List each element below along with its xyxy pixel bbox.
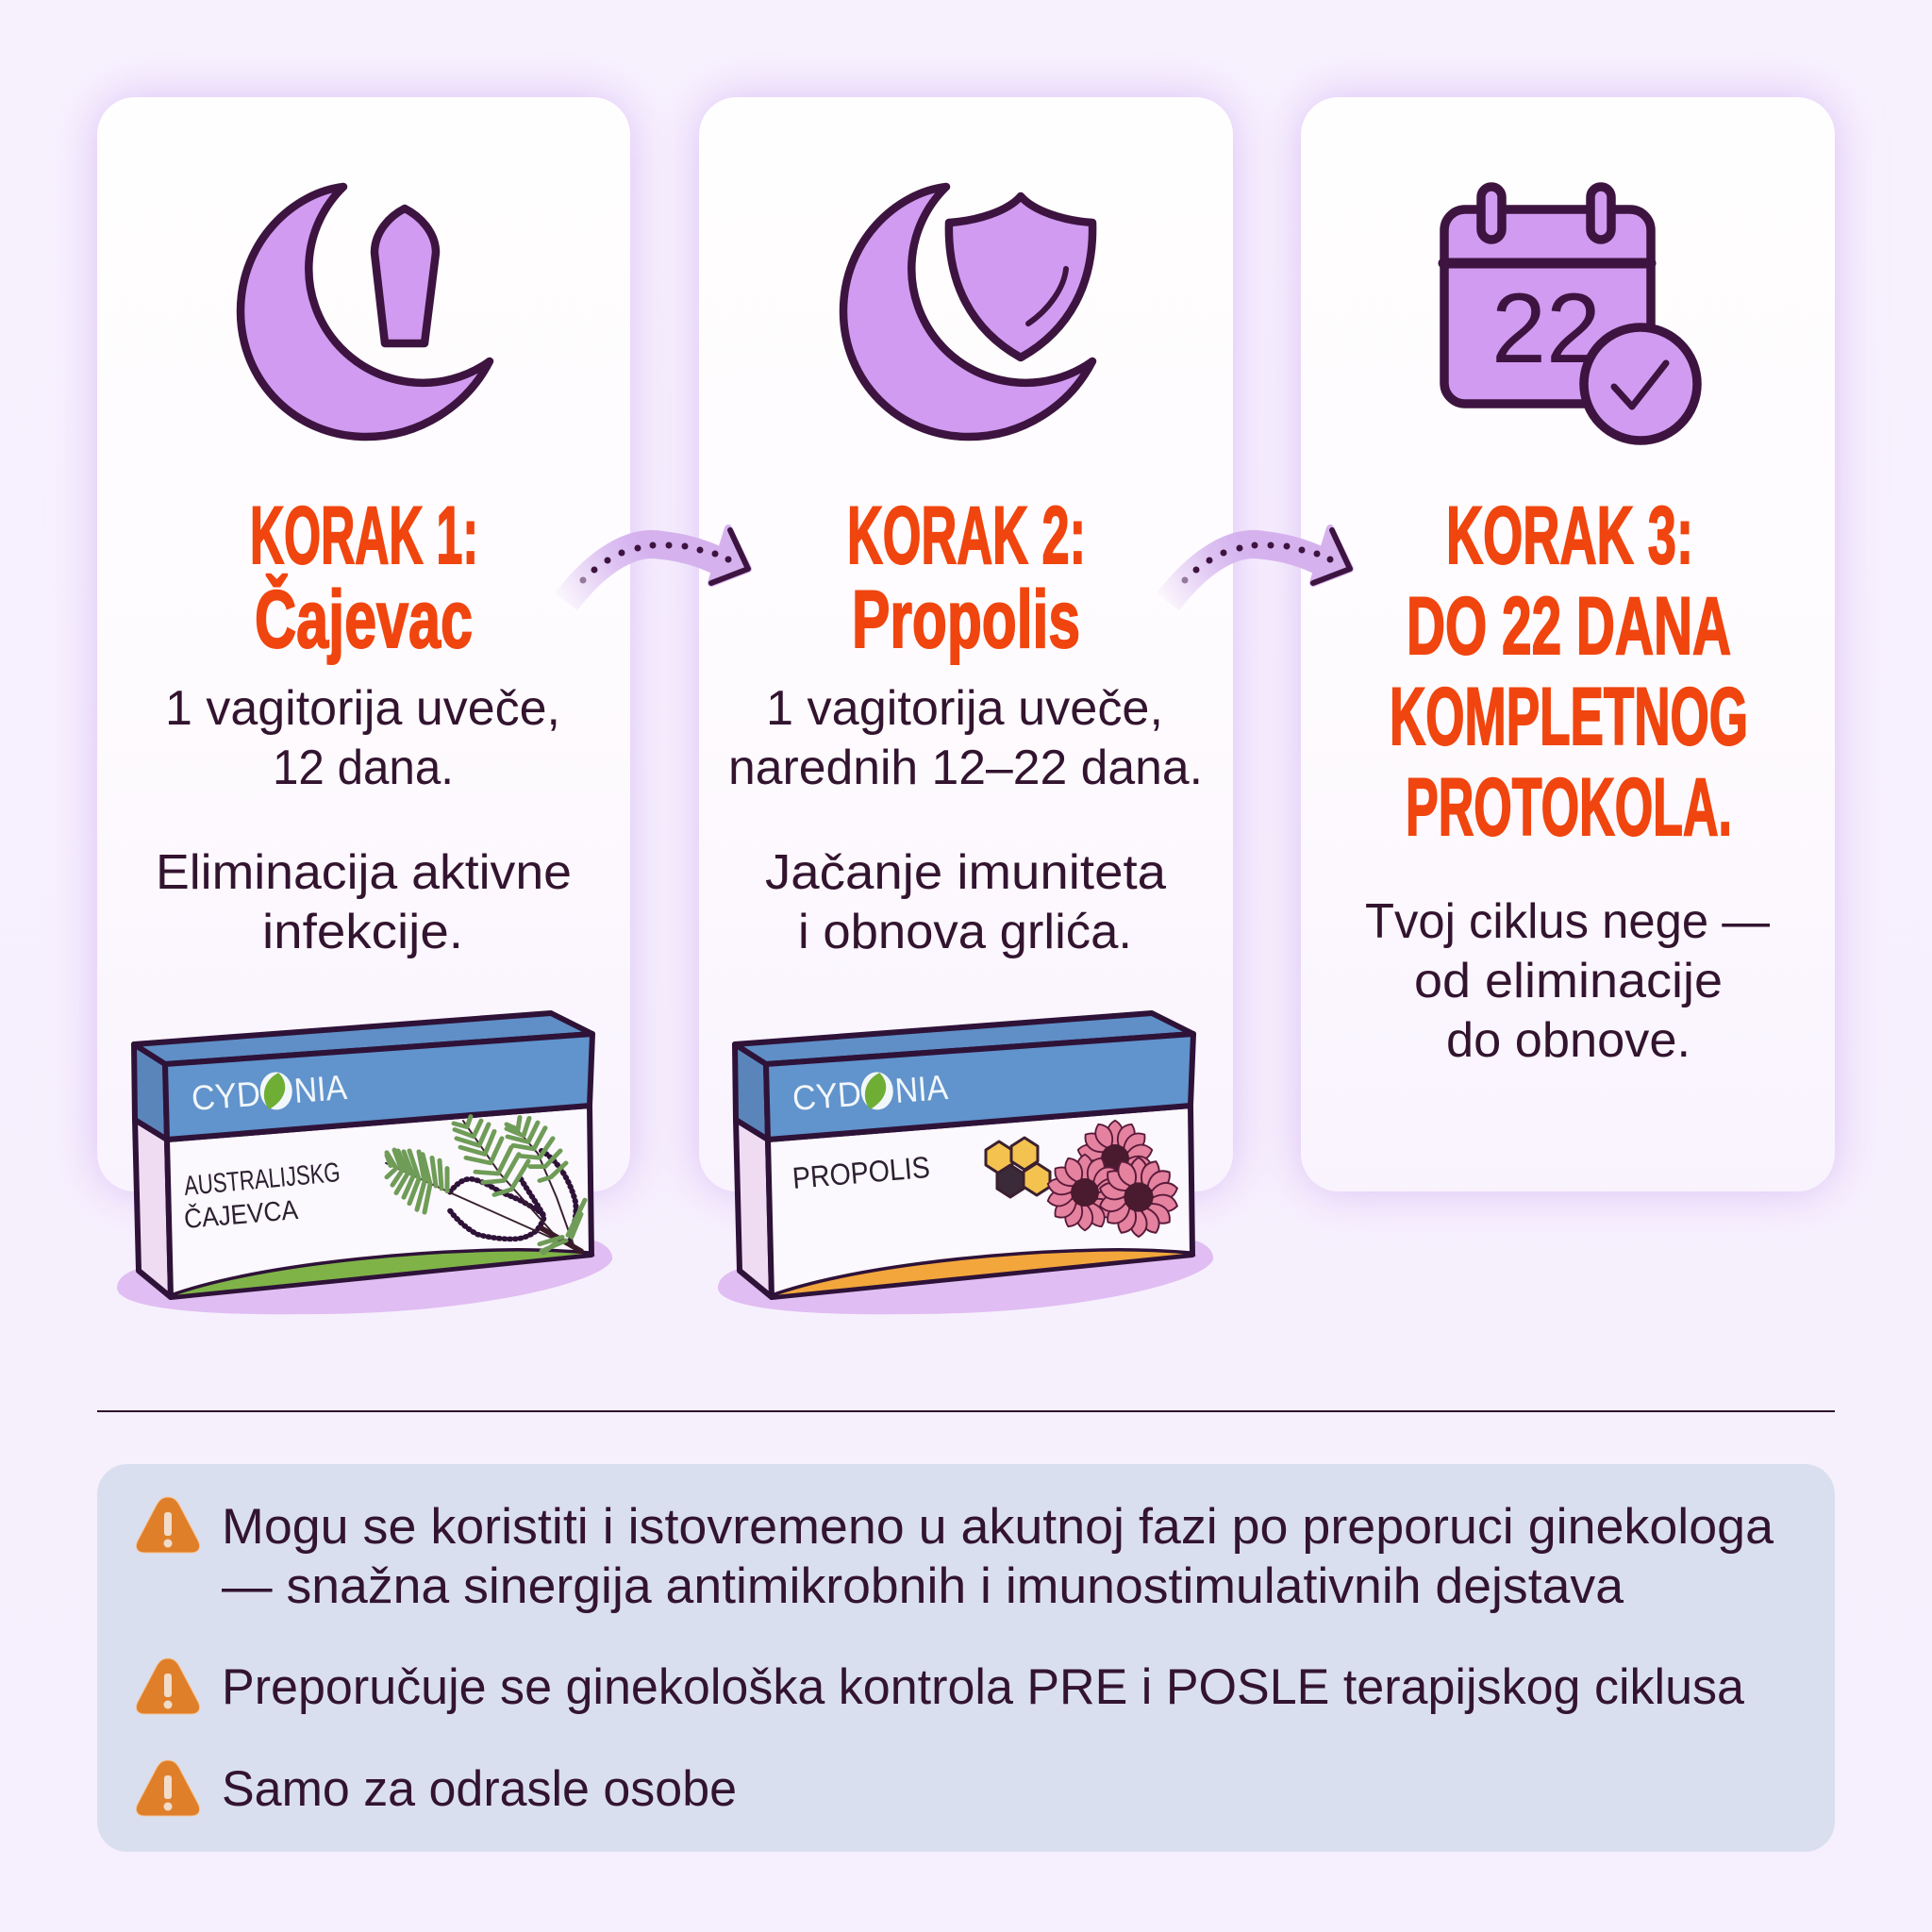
heading: step 2 xyxy=(847,491,1086,665)
brand logo xyxy=(191,1067,348,1118)
product name: AUSTRALIJSKG xyxy=(183,1158,341,1202)
text: step 3 description: od eliminacije xyxy=(1414,954,1723,1008)
text: step 2 dosage: 1 vagitorija uveče, xyxy=(766,681,1163,736)
box body xyxy=(134,1013,592,1297)
warning text 1: — snažna sinergija antimikrobnih i imunostimulativnih dejstava xyxy=(222,1558,1624,1614)
heading: step 3 xyxy=(1390,491,1748,853)
panel: step 2 card xyxy=(699,97,1233,1191)
brand logo: CYD xyxy=(191,1074,261,1118)
warning text 1: Mogu se koristiti i istovremeno u akutnoj fazi po preporuci ginekologa xyxy=(222,1499,1774,1555)
text: step 1 purpose: infekcije. xyxy=(262,905,463,959)
arrow: step 1 to step 2 xyxy=(566,528,748,602)
text: step 2 dosage: narednih 12–22 dana. xyxy=(728,741,1203,795)
honeycomb xyxy=(986,1138,1050,1197)
text: step 1 dosage: 1 vagitorija uveče, xyxy=(165,681,560,736)
brand logo: NIA xyxy=(893,1068,949,1110)
panel: step 3 card xyxy=(1301,97,1835,1191)
text: step 1 dosage xyxy=(165,681,560,795)
icon: warning 2 xyxy=(136,1658,200,1714)
text: step 2 purpose: i obnova grlića. xyxy=(798,905,1132,959)
text: step 3 description xyxy=(1365,894,1770,1068)
warning text 3: Samo za odrasle osobe xyxy=(222,1761,737,1817)
product name xyxy=(183,1158,341,1235)
icon: warning 3 xyxy=(136,1760,200,1816)
icon: moon with shield xyxy=(843,187,1092,437)
box shadow xyxy=(117,1236,612,1314)
heading: step 1: Čajevac xyxy=(255,575,473,665)
text: step 1 purpose xyxy=(156,845,572,959)
icon: warning 1 xyxy=(136,1497,200,1553)
heading: step 3: KORAK 3: xyxy=(1446,491,1693,581)
icon: calendar 22 with check: 22 xyxy=(1491,274,1601,384)
warning text 2: Preporučuje se ginekološka kontrola PRE i POSLE terapijskog ciklusa xyxy=(222,1659,1745,1715)
product box: tea tree xyxy=(117,1013,612,1314)
text: step 3 description: do obnove. xyxy=(1446,1013,1690,1068)
box shadow xyxy=(718,1236,1213,1314)
heading: step 1: KORAK 1: xyxy=(250,491,478,581)
colour swoosh xyxy=(772,1250,1192,1297)
tea tree illustration xyxy=(386,1116,585,1253)
divider xyxy=(97,1410,1835,1412)
text: step 2 dosage xyxy=(728,681,1203,795)
product name: ČAJEVCA xyxy=(183,1193,300,1235)
icon: calendar 22 with check xyxy=(1443,187,1697,441)
arrow: step 2 to step 3 xyxy=(1168,528,1350,602)
product name: PROPOLIS xyxy=(791,1150,931,1195)
heading: step 3: PROTOKOLA. xyxy=(1406,762,1732,853)
text: step 2 purpose xyxy=(765,845,1166,959)
product box: propolis xyxy=(718,1013,1213,1314)
text: step 3 description: Tvoj ciklus nege — xyxy=(1365,894,1770,949)
panel: warnings xyxy=(97,1464,1835,1852)
heading: step 3: DO 22 DANA xyxy=(1407,581,1731,672)
brand logo: NIA xyxy=(292,1068,348,1110)
heading: step 2: Propolis xyxy=(852,575,1080,665)
warning text 1 xyxy=(222,1499,1774,1614)
box body xyxy=(735,1013,1193,1297)
colour swoosh xyxy=(171,1250,591,1297)
card glow xyxy=(97,97,1835,1191)
echinacea flowers xyxy=(1046,1121,1179,1237)
brand logo xyxy=(791,1067,949,1118)
panel: step 1 card xyxy=(97,97,630,1191)
heading: step 1 xyxy=(250,491,478,665)
text: step 1 purpose: Eliminacija aktivne xyxy=(156,845,572,900)
text: step 1 dosage: 12 dana. xyxy=(273,741,454,795)
heading: step 2: KORAK 2: xyxy=(847,491,1086,581)
text: step 2 purpose: Jačanje imuniteta xyxy=(765,845,1166,900)
icon: moon with vaginal suppository xyxy=(241,187,490,437)
brand logo: CYD xyxy=(791,1074,862,1118)
